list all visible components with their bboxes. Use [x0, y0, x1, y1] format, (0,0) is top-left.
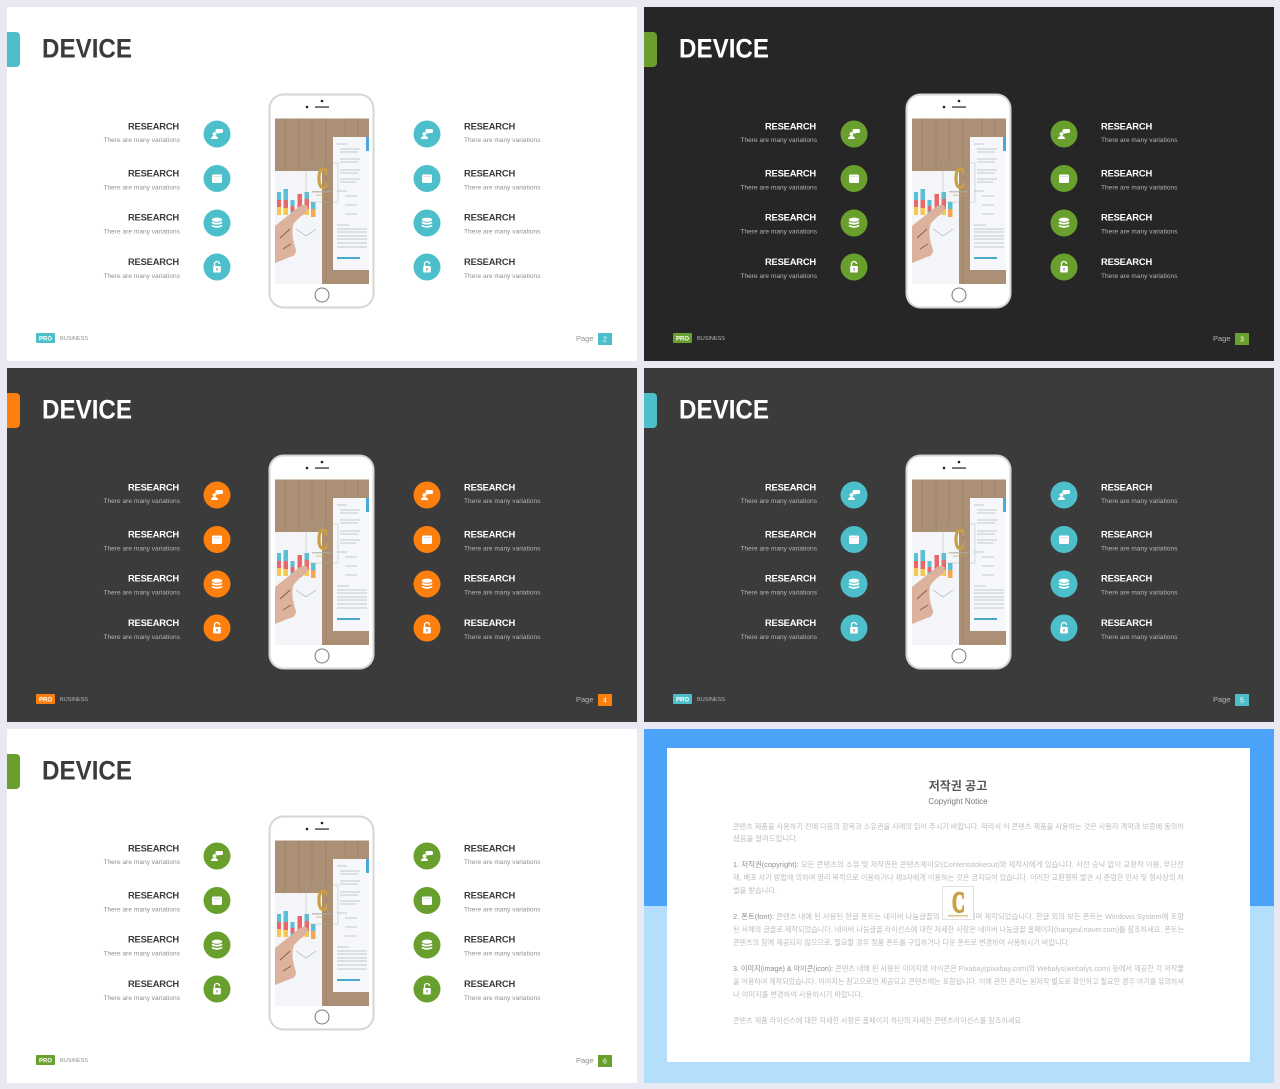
section 1: copyright — [733, 859, 1184, 895]
right item 2 — [1050, 526, 1178, 553]
page number: Page — [576, 1056, 594, 1065]
section 2: font — [733, 911, 1184, 947]
footer brand: BUSINESS — [60, 336, 88, 342]
right item 2 — [414, 165, 541, 192]
right item 1 — [414, 482, 541, 508]
left item 4 — [740, 614, 868, 642]
left item 1: There are many variations — [740, 498, 818, 505]
right item 3 — [1050, 210, 1178, 236]
left item 2: There are many variations — [740, 546, 818, 552]
intro paragraph: 콘텐츠 제품을 사용하기 전에 다음의 항목과 소유권을 사례의 읽어 주시기 바랍니다. 따라서 이 콘텐츠 제품을 사용하는 것은 사용자 계약과 보증에 동의하 — [733, 821, 1184, 831]
right item 4: There are many variations — [1101, 273, 1178, 280]
page number — [576, 1055, 612, 1067]
title tab — [7, 32, 20, 67]
page number: Page — [1213, 695, 1231, 704]
right item 1: There are many variations — [464, 859, 541, 866]
section 3: image and icon: 을 이용하여 제작되었습니다. 이미지는 참고으로만 제공되고 콘텐츠에는 포함됩니다. 이에 관한 권리는 원저작 별도로 확인하고 필요한 경우 여기를 유의하셔 — [733, 976, 1184, 986]
right item 4: There are many variations — [464, 995, 541, 1002]
right item 4: RESEARCH — [464, 256, 515, 267]
left item 3: RESEARCH — [765, 212, 816, 222]
right item 3: There are many variations — [1101, 228, 1178, 236]
right item 1 — [1050, 120, 1178, 148]
left item 1 — [740, 482, 868, 508]
right item 2: There are many variations — [464, 546, 541, 552]
left item 4 — [103, 254, 230, 280]
left item 1: RESEARCH — [765, 482, 816, 492]
page number: 5 — [1240, 698, 1244, 704]
page number: Page — [1213, 334, 1231, 343]
left item 3 — [740, 570, 868, 598]
left item 2: There are many variations — [740, 184, 818, 192]
left item 2 — [103, 165, 230, 192]
right item 1: RESEARCH — [464, 120, 515, 132]
right item 2 — [414, 526, 541, 553]
right item 1 — [414, 842, 541, 870]
right item 4 — [1050, 614, 1178, 642]
right item 2 — [414, 887, 541, 914]
left item 3 — [103, 570, 230, 598]
right item 4 — [1050, 254, 1178, 280]
right item 2: RESEARCH — [1101, 528, 1152, 540]
footer brand — [36, 1055, 88, 1065]
right item 4 — [414, 614, 541, 642]
left item 2 — [103, 526, 230, 553]
right item 2: RESEARCH — [464, 528, 515, 540]
section 1: copyright: 벌을 받습니다. — [733, 885, 777, 895]
right item 2: RESEARCH — [464, 890, 515, 900]
slide 1: white and teal — [7, 7, 637, 361]
right item 1: RESEARCH — [464, 842, 515, 854]
right item 4: RESEARCH — [1101, 617, 1152, 628]
left item 4 — [103, 976, 230, 1002]
left item 3 — [103, 932, 230, 958]
notice title: 저작권 공고 — [929, 778, 987, 793]
page number — [576, 333, 612, 345]
right item 4: There are many variations — [464, 634, 541, 641]
right item 1: RESEARCH — [464, 482, 515, 492]
right item 4: There are many variations — [1101, 634, 1178, 641]
left item 2: RESEARCH — [128, 528, 179, 540]
license note: 콘텐츠 제품 라이선스에 대한 자세한 사항은 홈페이지 하단의 자세한 콘텐츠라이선스를 참조하세요. — [733, 1015, 1023, 1025]
right item 3 — [414, 932, 541, 958]
left item 4: There are many variations — [103, 995, 181, 1002]
left item 3: RESEARCH — [128, 212, 179, 222]
watermark logo: C — [952, 886, 965, 919]
slide 5: white and green — [7, 729, 637, 1083]
left item 1 — [103, 120, 230, 148]
left item 1: RESEARCH — [128, 120, 179, 132]
phone mockup — [906, 454, 1012, 670]
left item 2: RESEARCH — [128, 168, 179, 178]
right item 1 — [414, 120, 541, 148]
right item 3 — [414, 570, 541, 598]
right item 4 — [414, 976, 541, 1002]
left item 2 — [103, 887, 230, 914]
left item 1: There are many variations — [103, 498, 181, 505]
right item 4: RESEARCH — [464, 617, 515, 628]
title: DEVICE — [42, 395, 132, 425]
right item 2: RESEARCH — [1101, 168, 1152, 178]
left item 4: RESEARCH — [128, 617, 179, 628]
footer brand: PRO — [676, 697, 689, 703]
page number: 2 — [603, 336, 607, 344]
phone mockup — [268, 94, 374, 308]
left item 4: There are many variations — [103, 273, 181, 280]
left item 2: There are many variations — [103, 184, 181, 192]
right item 3 — [1050, 570, 1178, 598]
left item 4 — [740, 254, 868, 280]
title tab — [644, 393, 657, 428]
page number: 3 — [1240, 336, 1244, 344]
right item 3: There are many variations — [464, 228, 541, 236]
watermark logo — [942, 886, 974, 920]
section 3: image and icon: 3. 이미지(image) & 아이콘(icon): 콘텐츠 내에 된 사용된 이미지와 아이콘은 Pixabay(pixabay.com)와 Webalys(webalys.com) 등에서 제공한 각 저작물 — [733, 963, 1184, 973]
phone mockup: C — [317, 523, 328, 556]
phone mockup — [906, 94, 1012, 308]
title: DEVICE — [679, 395, 769, 425]
phone mockup: C — [317, 162, 328, 195]
right item 2: There are many variations — [1101, 546, 1178, 552]
left item 1 — [103, 482, 230, 508]
section 1: copyright: 1. 저작권(copyright): 모든 콘텐츠의 소유 및 저작권은 콘텐츠제이오(Contentstokeout)와 제작사에게 있습니다. 사전 승낙 없이 교환적 이용, 무단전 — [733, 859, 1184, 869]
left item 2: There are many variations — [103, 546, 181, 552]
footer brand: PRO — [676, 336, 689, 342]
right item 3: There are many variations — [464, 590, 541, 596]
title tab — [7, 754, 20, 789]
left item 4: RESEARCH — [765, 617, 816, 628]
section 3: image and icon: 나 이미지를 변경하여 사용하시기 바랍니다. — [733, 989, 863, 999]
right item 3: RESEARCH — [1101, 572, 1152, 584]
left item 2: RESEARCH — [765, 528, 816, 540]
footer brand: PRO — [39, 336, 52, 342]
left item 2 — [740, 526, 868, 553]
notice card — [667, 748, 1250, 1062]
left item 2: RESEARCH — [128, 890, 179, 900]
left item 3: There are many variations — [740, 590, 818, 596]
left item 3: There are many variations — [740, 228, 818, 236]
page number — [1213, 694, 1249, 706]
phone mockup: C — [317, 884, 328, 917]
left item 1: RESEARCH — [128, 842, 179, 854]
right item 3: RESEARCH — [464, 934, 515, 944]
right item 3: There are many variations — [1101, 590, 1178, 596]
footer brand — [36, 694, 88, 704]
left item 1 — [103, 842, 230, 870]
left item 1: There are many variations — [103, 859, 181, 866]
left item 2: There are many variations — [103, 906, 181, 914]
slide 6: copyright notice — [644, 729, 1274, 1083]
slide 2: black and green — [644, 7, 1274, 361]
left item 3 — [740, 210, 868, 236]
left item 3: There are many variations — [103, 228, 181, 236]
footer brand: BUSINESS — [60, 1058, 88, 1064]
section 2: font: 콘텐츠의 함께 제공되지 않으므로, 필요할 경우 정품 폰트를 구입하거나 다운 폰트로 변경하여 사용하시기 바랍니다. — [733, 937, 1070, 947]
right item 1: There are many variations — [1101, 137, 1178, 144]
intro paragraph — [733, 821, 1184, 843]
left item 4: RESEARCH — [128, 256, 179, 267]
footer brand: BUSINESS — [697, 336, 725, 342]
phone mockup: C — [954, 523, 965, 556]
page number: Page — [576, 695, 594, 704]
left item 1: There are many variations — [103, 137, 181, 144]
page number — [1213, 333, 1249, 345]
slide 3: charcoal and orange — [7, 368, 637, 722]
phone mockup — [268, 454, 374, 670]
left item 3: There are many variations — [103, 590, 181, 596]
left item 4 — [103, 614, 230, 642]
footer brand — [673, 333, 725, 343]
right item 1 — [1050, 482, 1178, 508]
title tab — [644, 32, 657, 67]
right item 1: RESEARCH — [1101, 120, 1152, 132]
section 2: font: 2. 폰트(font): 콘텐츠 내에 된 사용된 한글 폰트는 네이버 나눔글꼴의 제작권자이며 제작되었습니다. 한글 외의 보든 폰트는 Windows System에 포함 — [733, 911, 1184, 921]
right item 4: RESEARCH — [1101, 256, 1152, 267]
title: DEVICE — [679, 34, 769, 64]
footer brand — [36, 333, 88, 343]
left item 4: RESEARCH — [128, 978, 179, 989]
left item 3: RESEARCH — [128, 572, 179, 584]
left item 1: There are many variations — [740, 137, 818, 144]
left item 1: RESEARCH — [128, 482, 179, 492]
right item 3 — [414, 210, 541, 236]
right item 3: RESEARCH — [1101, 212, 1152, 222]
right item 1: There are many variations — [464, 137, 541, 144]
right item 3: RESEARCH — [464, 212, 515, 222]
right item 3: There are many variations — [464, 950, 541, 958]
right item 1: There are many variations — [464, 498, 541, 505]
right item 1: There are many variations — [1101, 498, 1178, 505]
right item 2 — [1050, 165, 1178, 192]
page number: 4 — [603, 698, 607, 704]
right item 2: There are many variations — [464, 184, 541, 192]
footer brand: BUSINESS — [60, 697, 88, 703]
page number: 6 — [603, 1058, 607, 1066]
right item 4: There are many variations — [464, 273, 541, 280]
left item 3: RESEARCH — [765, 572, 816, 584]
left item 4: There are many variations — [740, 273, 818, 280]
footer brand — [673, 694, 725, 704]
left item 4: RESEARCH — [765, 256, 816, 267]
phone mockup — [268, 816, 374, 1030]
left item 4: There are many variations — [740, 634, 818, 641]
left item 2 — [740, 165, 868, 192]
left item 4: There are many variations — [103, 634, 181, 641]
notice subtitle: Copyright Notice — [928, 797, 988, 806]
left item 3: There are many variations — [103, 950, 181, 958]
left item 3 — [103, 210, 230, 236]
section 1: copyright: 재, 배포 사기 방법에 의하여 영리 목적으로 이용하거나 제3자에게 이용하는 것은 금지되어 있습니다. 이러한 교환행위 발견 시 준엄한 민사 및 형사상의 처 — [733, 872, 1184, 882]
left item 1: RESEARCH — [765, 120, 816, 132]
right item 2: There are many variations — [464, 906, 541, 914]
page number — [576, 694, 612, 706]
left item 3: RESEARCH — [128, 934, 179, 944]
section 2: font: 된 서체의 글꼴로 제작되었습니다. 네이버 나눔글꼴 라이선스에 대한 자세한 사항은 네이버 나눔글꼴 홈페이지(hangeul.naver.com)를 참조하세요. 폰트는 — [733, 924, 1184, 934]
title tab — [7, 393, 20, 428]
footer brand: PRO — [39, 697, 52, 703]
slide 4: charcoal and teal — [644, 368, 1274, 722]
right item 3: RESEARCH — [464, 572, 515, 584]
phone mockup: C — [954, 162, 965, 195]
title: DEVICE — [42, 34, 132, 64]
right item 4 — [414, 254, 541, 280]
right item 1: RESEARCH — [1101, 482, 1152, 492]
title: DEVICE — [42, 756, 132, 786]
footer brand: BUSINESS — [697, 697, 725, 703]
right item 2: RESEARCH — [464, 168, 515, 178]
footer brand: PRO — [39, 1058, 52, 1064]
section 3: image and icon — [733, 963, 1184, 999]
left item 1 — [740, 120, 868, 148]
right item 4: RESEARCH — [464, 978, 515, 989]
page number: Page — [576, 334, 594, 343]
right item 2: There are many variations — [1101, 184, 1178, 192]
intro paragraph: 셨음을 알려드립니다. — [733, 833, 798, 843]
left item 2: RESEARCH — [765, 168, 816, 178]
